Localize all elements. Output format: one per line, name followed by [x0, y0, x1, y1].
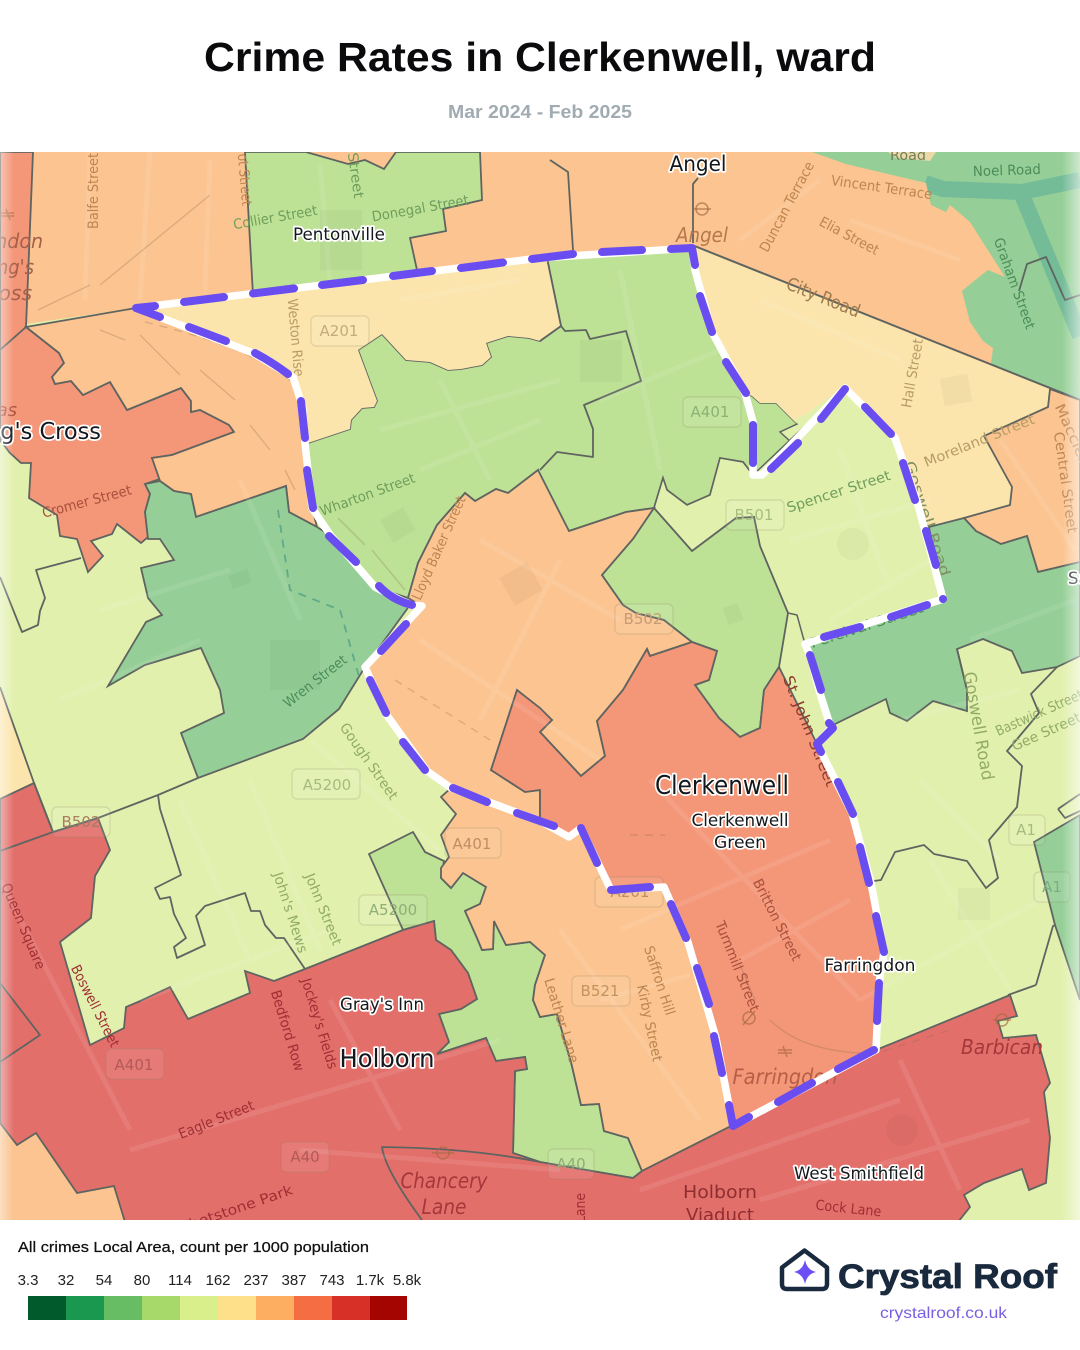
legend values: 3.3 — [18, 1272, 38, 1289]
street labels: Leather Lane — [540, 976, 581, 1065]
street labels: Saffron Hill — [640, 944, 678, 1017]
area: north peach — [26, 152, 1005, 364]
place labels: Clerkenwell — [692, 811, 788, 831]
road shields: B502 — [624, 610, 662, 628]
title: Crime Rates in Clerkenwell, ward — [204, 34, 876, 80]
logo: Crystal Roof — [782, 1250, 1058, 1322]
road shields: B502 — [62, 813, 100, 831]
legend values: 32 — [58, 1272, 74, 1289]
place labels: Farringdon — [824, 956, 916, 976]
road shields: A401 — [691, 403, 729, 421]
area: Leather Lane lime — [369, 832, 642, 1178]
area: southern lime — [602, 508, 788, 737]
street labels: Boswell Street — [67, 962, 122, 1050]
street labels: Gough Street — [336, 720, 401, 804]
area: north-east green — [812, 152, 1080, 400]
street labels: Britton Street — [749, 876, 804, 964]
website: crystalroof.co.uk — [880, 1305, 1008, 1322]
street labels: Eagle Street — [176, 1098, 257, 1143]
road shields: B521 — [581, 982, 619, 1000]
street labels: Viaduct — [686, 1205, 754, 1226]
street labels: Whetstone Park — [172, 1182, 296, 1238]
area: peach west of the ward — [26, 308, 317, 527]
street labels: Elia Street — [816, 214, 882, 259]
street labels: Barbican — [961, 1035, 1043, 1059]
street labels: Angel — [674, 223, 728, 247]
area: cream patch at top edge — [888, 152, 936, 161]
area: Pentonville — [245, 152, 482, 295]
street labels: John Street — [301, 870, 345, 948]
street labels: Street — [344, 152, 366, 200]
area: central peach — [365, 470, 692, 821]
road shields: A5200 — [369, 901, 417, 919]
legend values: 5.8k — [393, 1272, 422, 1289]
legend values — [18, 1272, 422, 1289]
dashed tunnel line in Wren Street green — [278, 510, 360, 680]
street labels: Goswell Road — [901, 459, 953, 578]
legend values: 743 — [319, 1272, 345, 1289]
area: Percival Street green — [805, 518, 1080, 725]
street labels: Lloyd Baker Street — [409, 494, 470, 603]
legend — [18, 1239, 422, 1320]
street labels: Cromer Street — [40, 482, 134, 522]
building blocks — [334, 254, 880, 1272]
area: City Road pale yellow — [692, 245, 1050, 527]
legend values: 237 — [243, 1272, 269, 1289]
area: eastern edge green — [1034, 815, 1080, 1000]
legend values: 162 — [205, 1272, 231, 1289]
street grid — [0, 152, 1075, 1200]
street labels: Weston Rise — [284, 298, 306, 377]
street labels: Vincent Terrace — [830, 173, 933, 203]
date range subtitle: Mar 2024 - Feb 2025 — [448, 102, 632, 122]
road shields: B501 — [735, 506, 773, 524]
legend values: 114 — [168, 1272, 192, 1289]
area: central lime — [305, 248, 753, 598]
area: Holborn and Smithfield red — [0, 783, 1050, 1222]
street labels: Farringdon — [732, 1065, 838, 1089]
street labels: Kirby Street — [633, 983, 665, 1063]
inner ward lines — [0, 160, 1080, 1220]
street labels: Jockey's Fields — [297, 976, 340, 1071]
area: lower-left peach — [0, 1123, 125, 1220]
street labels: Percival Street — [808, 600, 926, 652]
legend values: 1.7k — [356, 1272, 385, 1289]
wordmark: Crystal Roof — [838, 1258, 1058, 1296]
street labels: Bedford Row — [267, 988, 307, 1073]
street labels: Road — [890, 148, 926, 164]
place labels — [0, 152, 1080, 1184]
road shields — [52, 316, 1070, 1179]
street labels: Lane — [422, 1195, 466, 1219]
road shields: A401 — [453, 835, 491, 853]
street labels: Turnmill Street — [711, 918, 762, 1014]
legend colour scale — [28, 1296, 407, 1320]
street labels: Chancery — [400, 1169, 488, 1193]
area: Clerkenwell salmon — [491, 642, 884, 1126]
legend values: 387 — [281, 1272, 307, 1289]
street labels: Moreland Street — [922, 412, 1038, 471]
canal — [925, 180, 1080, 336]
ward boundary: purple dashes — [136, 248, 943, 1126]
tube station icons — [0, 203, 1011, 1159]
place labels: Gray's Inn — [340, 995, 424, 1015]
legend title: All crimes Local Area, count per 1000 population — [18, 1239, 369, 1256]
place labels: Green — [714, 833, 766, 853]
street labels: Hall Street — [899, 337, 927, 409]
place labels: Clerkenwell — [655, 771, 789, 801]
legend values: 54 — [96, 1272, 112, 1289]
street labels: City Road — [783, 274, 863, 322]
ward boundary: white base line — [136, 248, 943, 1126]
area: far-west pale yellow strip — [0, 687, 34, 799]
street labels: Wren Street — [281, 652, 351, 712]
place labels: Holborn — [340, 1044, 434, 1073]
street labels: Duncan Terrace — [757, 159, 818, 255]
legend values: 80 — [134, 1272, 150, 1289]
street labels: Goswell Road — [959, 670, 997, 782]
area: Central Street peach — [964, 389, 1080, 572]
road shields: A1 — [1016, 821, 1036, 839]
street labels: Central Street — [1050, 431, 1080, 535]
icon: house with star — [782, 1250, 827, 1289]
road shields: A40 — [290, 1148, 320, 1166]
rail lines — [38, 195, 950, 1060]
area: wedge lime — [750, 395, 798, 470]
street labels: Spencer Street — [785, 468, 893, 516]
road shields: A1 — [1042, 878, 1062, 896]
street labels: Balfe Street — [86, 153, 102, 229]
area: Saffron Hill peach — [441, 788, 731, 1171]
street labels: ot Street — [234, 153, 254, 207]
street labels: Graham Street — [990, 236, 1038, 332]
street labels: Lane — [573, 1193, 589, 1223]
road shields: A5200 — [303, 776, 351, 794]
place labels: West Smithfield — [794, 1164, 924, 1184]
area: Spencer Street pale green — [654, 426, 805, 641]
area: Wren Street green — [108, 481, 410, 778]
street labels: John's Mews — [269, 869, 310, 955]
street labels: Donegal Street — [371, 193, 470, 225]
street labels: Collier Street — [232, 203, 319, 233]
place labels: Angel — [670, 152, 726, 176]
map edge fades — [0, 152, 1080, 1220]
street labels: Noel Road — [973, 162, 1041, 180]
area: northern pale yellow — [136, 258, 561, 443]
street labels: Wharton Street — [318, 470, 418, 520]
street labels: Cock Lane — [815, 1198, 882, 1220]
place labels: Pentonville — [293, 225, 385, 245]
area: King's Cross salmon — [0, 152, 234, 572]
road shields: A201 — [611, 883, 649, 901]
road shields: A201 — [320, 322, 358, 340]
road shields: A401 — [115, 1056, 153, 1074]
street labels: St. John Street — [779, 673, 840, 789]
street labels: Holborn — [683, 1182, 757, 1203]
road shields: A40 — [556, 1155, 586, 1173]
